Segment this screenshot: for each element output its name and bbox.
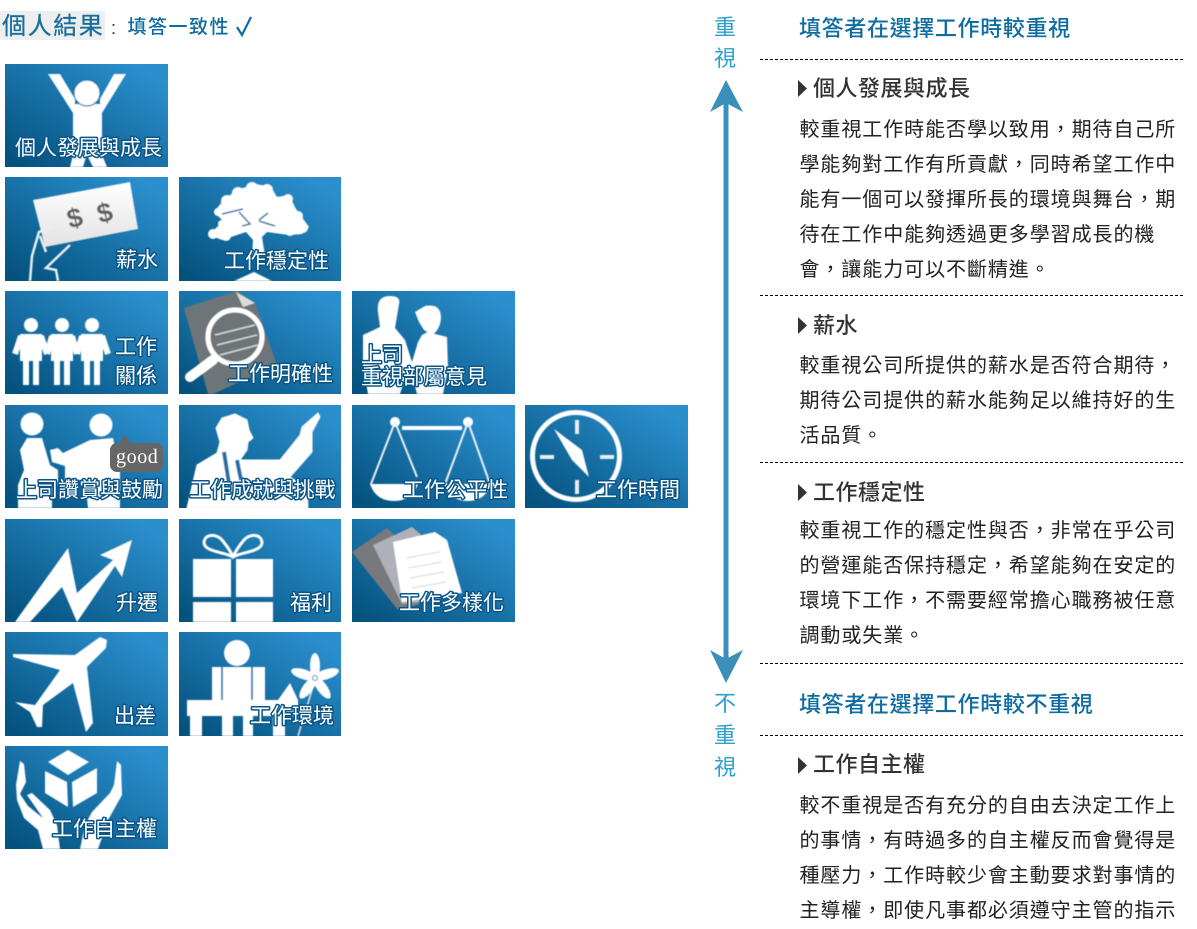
tile: 薪水: [5, 177, 168, 281]
label: 工作多樣化: [399, 592, 504, 615]
tile: 出差: [5, 632, 168, 736]
label: 個人發展與成長: [15, 137, 162, 160]
label: 工作環境: [250, 705, 334, 728]
section: 工作穩定性: 工作穩定性: [813, 480, 926, 505]
label: 關係: [115, 365, 157, 388]
axis label: bottom: 不: [714, 691, 736, 716]
label: 上司讚賞與鼓勵: [16, 479, 163, 502]
tile: 工作成就與挑戰: [179, 405, 341, 508]
section: 薪水: 期待公司提供的薪水能夠足以維持好的生: [800, 389, 1176, 412]
icon: rising zigzag arrow: [15, 540, 132, 622]
section: 工作穩定性: [798, 480, 1176, 647]
label: 薪水: [116, 249, 158, 272]
tile: 工作時間: [525, 405, 688, 508]
axis label: top: 視: [714, 46, 736, 71]
tile: 工作多樣化: [352, 519, 515, 622]
label: 福利: [290, 592, 332, 615]
icon: tree: [208, 182, 309, 281]
section: 工作穩定性: 的營運能否保持穩定，希望能夠在安定的: [800, 554, 1176, 577]
label: 重視部屬意見: [361, 366, 487, 389]
tile: 上司讚賞與鼓勵: [5, 405, 168, 508]
label: 工作: [115, 336, 157, 359]
title: personal result: 填答一致性: [128, 16, 230, 38]
icon: three people: [15, 318, 108, 385]
icon: two people talking: [363, 296, 448, 394]
section: 工作自主權: 主導權，即使凡事都必須遵守主管的指示: [800, 899, 1176, 922]
section: 工作自主權: 的事情，有時過多的自主權反而會覺得是: [800, 829, 1176, 852]
arrow: importance axis: [710, 80, 743, 683]
label: [115, 336, 157, 388]
tile: 工作關係: [5, 291, 168, 394]
tile: 工作自主權: [5, 746, 168, 849]
section: 個人發展與成長: 學能夠對工作有所貢獻，同時希望工作中: [800, 153, 1176, 176]
tile: 個人發展與成長: [5, 64, 168, 167]
section: 薪水: 薪水: [813, 313, 858, 338]
section: 薪水: 活品質。: [800, 424, 883, 447]
axis label: bottom: 視: [714, 755, 736, 780]
section: 個人發展與成長: 會，讓能力可以不斷精進。: [800, 258, 1051, 281]
tile: 工作明確性: [179, 291, 341, 394]
title: personal result: :: [111, 18, 116, 38]
label: 出差: [114, 705, 156, 728]
axis label: top: 重: [714, 15, 736, 40]
label: 工作自主權: [52, 818, 157, 841]
section: 薪水: 較重視公司所提供的薪水是否符合期待，: [800, 354, 1176, 377]
section: 個人發展與成長: 個人發展與成長: [813, 76, 971, 101]
icon: person at desk with flower: [187, 640, 340, 736]
tile: 升遷: [5, 519, 168, 622]
icon: document and magnifier: [184, 291, 277, 394]
icon: two people shaking hands: [18, 412, 120, 508]
section: 工作穩定性: 環境下工作，不需要經常擔心職務被任意: [800, 589, 1176, 612]
section: 工作自主權: 工作自主權: [813, 752, 926, 777]
section: 工作自主權: 種壓力，工作時較少會主動要求對事情的: [800, 864, 1176, 887]
section: 工作穩定性: 調動或失業。: [800, 624, 925, 647]
axis label: bottom: 重: [714, 723, 736, 748]
icon: airplane: [13, 637, 107, 732]
tile: 上司重視部屬意見: [352, 291, 515, 394]
heading: not important: 填答者在選擇工作時較不重視: [799, 692, 1093, 717]
label: [361, 344, 487, 389]
icon: gift box: [193, 535, 273, 622]
label: 工作時間: [596, 479, 680, 502]
icon: hands holding a cube: [16, 750, 122, 849]
section: 薪水: [798, 313, 1176, 447]
axis label: bottom: [714, 691, 736, 780]
section: 個人發展與成長: [798, 76, 1176, 281]
icon: hand holding money card: $: [64, 202, 86, 235]
icon: hand holding money card: $: [94, 196, 116, 229]
label: 工作公平性: [403, 479, 508, 502]
axis label: top: [714, 15, 736, 71]
title: personal result: [0, 11, 251, 40]
tile: 工作環境: [179, 632, 341, 736]
label: 上司: [361, 344, 403, 367]
section: 個人發展與成長: 待在工作中能夠透過更多學習成長的機: [800, 223, 1155, 246]
icon: balance scale: [370, 417, 491, 501]
label: 升遷: [116, 592, 158, 615]
section: 個人發展與成長: 能有一個可以發揮所長的環境與舞台，期: [800, 188, 1176, 211]
section: 工作穩定性: 較重視工作的穩定性與否，非常在乎公司: [800, 519, 1176, 542]
label: 工作穩定性: [224, 250, 329, 273]
icon: person with raised arms: [48, 74, 126, 167]
callout: good speech bubble: [110, 434, 163, 472]
icon: man pointing upward: [187, 413, 320, 508]
label: 工作成就與挑戰: [190, 479, 336, 502]
callout: good speech bubble: good: [116, 446, 158, 468]
tile: 福利: [179, 519, 341, 622]
section: 個人發展與成長: 較重視工作時能否學以致用，期待自己所: [800, 118, 1176, 141]
heading: important: 填答者在選擇工作時較重視: [799, 16, 1071, 41]
title: personal result: 個人結果: [2, 13, 104, 40]
icon: clock: [532, 412, 620, 500]
icon: hand holding money card: [30, 182, 138, 281]
tile: 工作公平性: [352, 405, 515, 508]
section: 工作自主權: 較不重視是否有充分的自由去決定工作上: [800, 794, 1176, 817]
label: 工作明確性: [228, 363, 333, 386]
section: 工作自主權: [798, 752, 1176, 922]
icon: stack of papers: [352, 527, 462, 610]
tile: 工作穩定性: [179, 177, 341, 281]
